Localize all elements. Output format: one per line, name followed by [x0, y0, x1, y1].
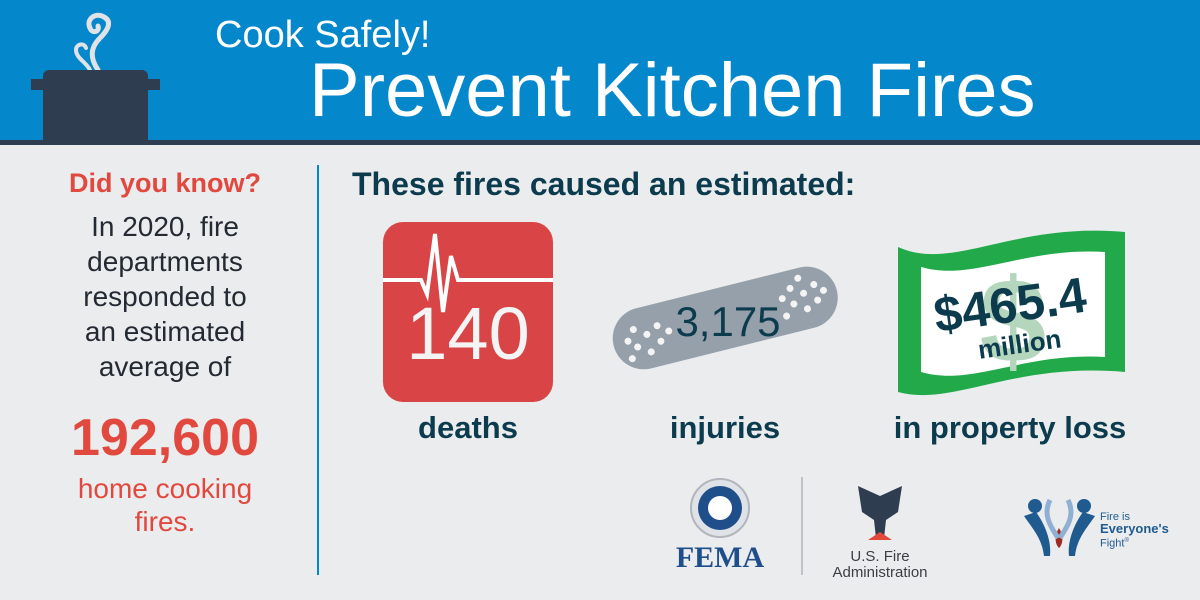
header banner: Prevent Kitchen Fires	[309, 48, 1036, 133]
icon: money bill: $465.4	[930, 267, 1090, 343]
icon: cooking pot with steam	[31, 12, 160, 140]
header banner	[0, 0, 1200, 145]
divider	[317, 165, 319, 575]
icon: deaths heart monitor: 140	[406, 292, 530, 375]
text block: In 2020, fire	[91, 211, 239, 242]
left panel: did you know	[69, 168, 261, 537]
icon: money bill: $	[980, 254, 1046, 388]
icon: bandage	[612, 266, 838, 370]
logo: US Fire Administration	[832, 486, 928, 581]
statistic: 192,600	[71, 409, 259, 467]
text block: average of	[99, 351, 231, 382]
logo: US Fire Administration: Administration	[832, 564, 928, 581]
icon: money bill: million	[976, 323, 1063, 365]
label deaths: deaths	[418, 410, 518, 445]
icon: deaths heart monitor	[383, 222, 553, 402]
icon: bandage: 3,175	[675, 298, 781, 345]
logo: Fire is Everyone's Fight	[1024, 499, 1169, 556]
left panel: did you know: home cooking	[78, 473, 252, 504]
logo: Fire is Everyone's Fight: Fire is	[1100, 511, 1130, 523]
logo: US Fire Administration: U.S. Fire	[850, 548, 910, 565]
text block: responded to	[83, 281, 247, 312]
logo: Fire is Everyone's Fight: Fight®	[1100, 538, 1129, 550]
left panel: did you know: fires.	[135, 506, 195, 537]
text block: departments	[87, 246, 243, 277]
title: Cook Safely!	[215, 14, 430, 56]
heading: Did you know?	[69, 168, 261, 198]
label injuries: injuries	[670, 410, 780, 445]
icon: money bill	[898, 230, 1125, 396]
text block	[83, 211, 247, 382]
heading: these fires caused: These fires caused an estimated:	[352, 166, 855, 202]
label property loss: in property loss	[894, 410, 1126, 445]
logo: Fire is Everyone's Fight: Everyone's	[1100, 521, 1169, 536]
text block: an estimated	[85, 316, 245, 347]
logo: FEMA	[676, 478, 764, 574]
logo: FEMA: FEMA	[676, 541, 764, 574]
divider logos	[801, 477, 803, 575]
